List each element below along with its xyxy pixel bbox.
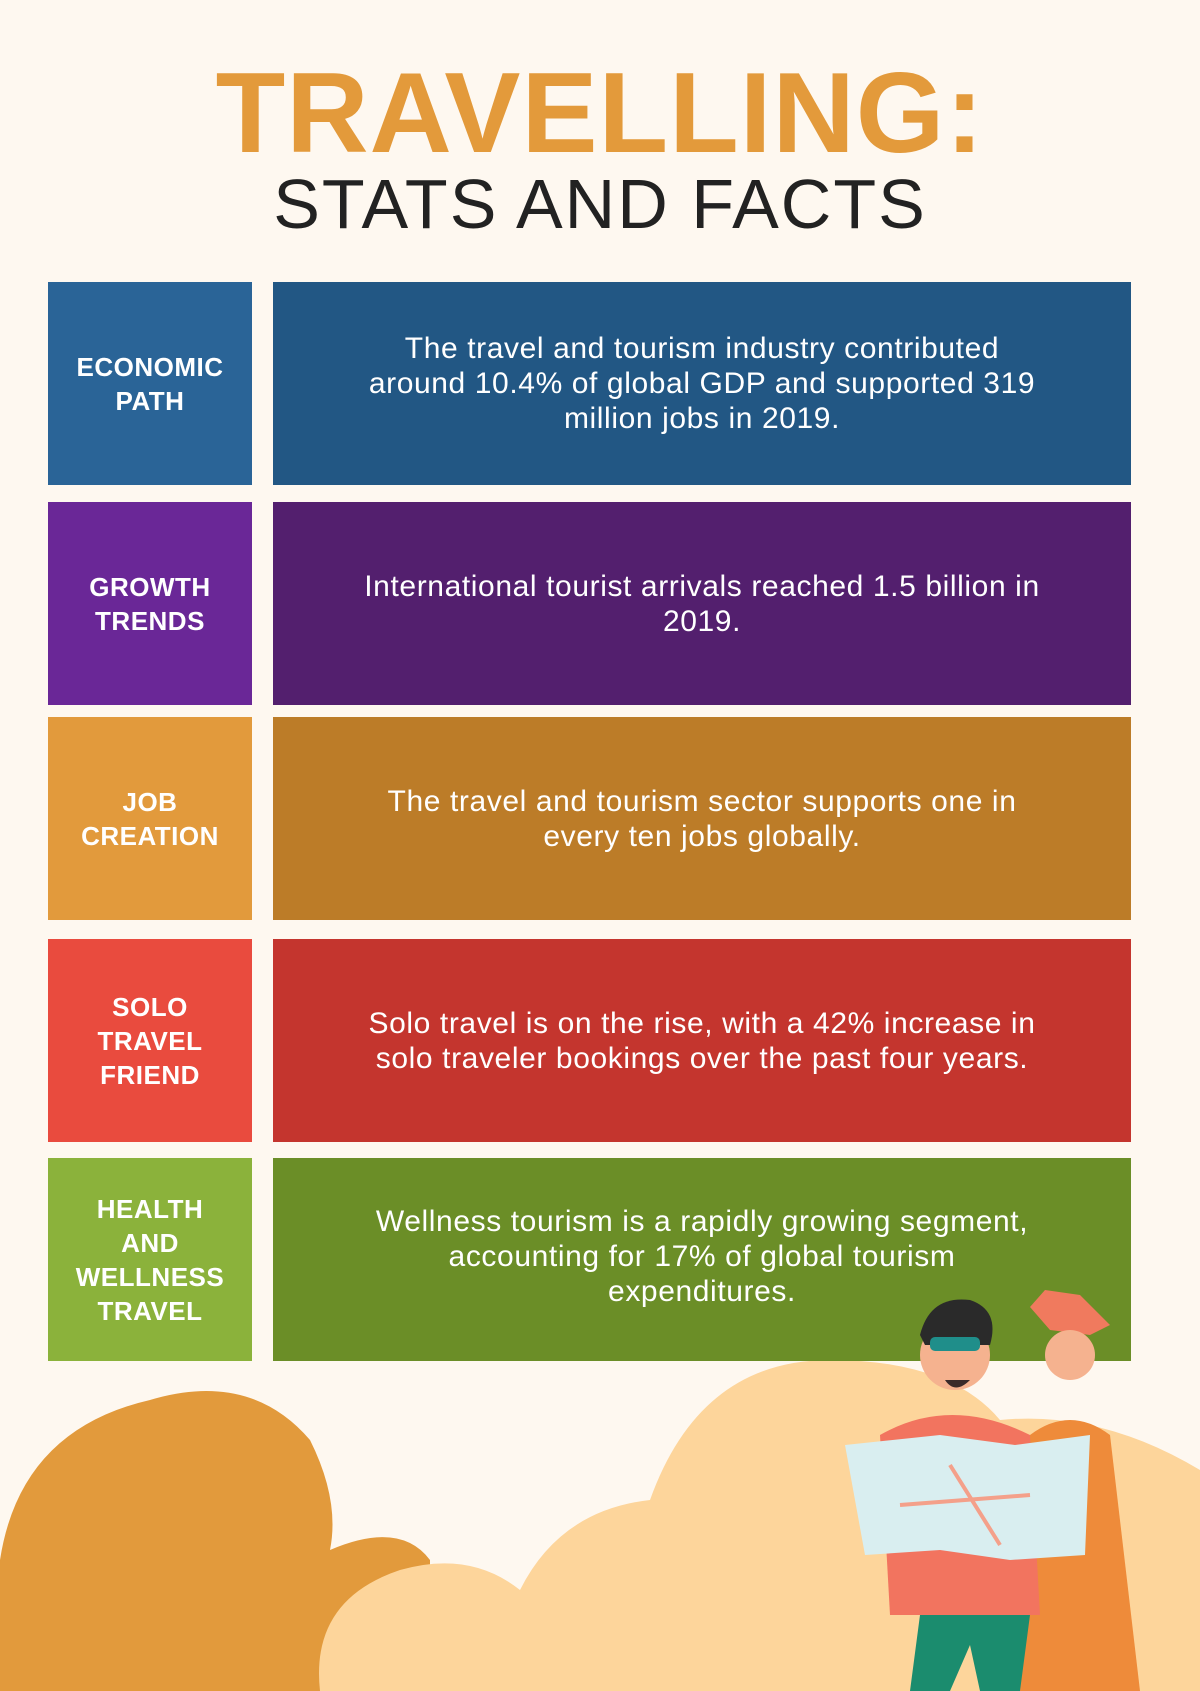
row 4 label: TRAVEL (97, 1026, 203, 1056)
row 5 text: accounting for 17% of global tourism (449, 1240, 955, 1273)
background clouds (0, 1361, 1200, 1691)
row 5 label (48, 1158, 252, 1361)
row 3 text: The travel and tourism sector supports one in (388, 784, 1016, 818)
row 5 label: TRAVEL (97, 1296, 203, 1326)
row 3 label: JOB (122, 786, 177, 816)
row 2 label: GROWTH (89, 572, 211, 602)
row 1 text (273, 282, 1131, 485)
row 5 label: AND (121, 1228, 179, 1258)
row 3 label (48, 717, 252, 920)
title: TRAVELLING: (216, 50, 984, 177)
row 1 label (48, 282, 252, 485)
row 4 text (273, 939, 1131, 1142)
row 2 label (48, 502, 252, 705)
row 4 text: solo traveler bookings over the past four years. (376, 1042, 1028, 1074)
row 1 text: around 10.4% of global GDP and supported 319 (369, 367, 1035, 400)
illustration: travellers with map (845, 1290, 1140, 1691)
row 5 text: Wellness tourism is a rapidly growing segment, (376, 1205, 1028, 1238)
row 4 text: Solo travel is on the rise, with a 42% increase in (368, 1006, 1036, 1040)
row 2 text: International tourist arrivals reached 1.5 billion in (364, 570, 1040, 602)
row 1 text: The travel and tourism industry contributed (405, 332, 999, 365)
row 3 text: every ten jobs globally. (543, 820, 861, 852)
row 5 text (273, 1158, 1131, 1361)
row 1 label: ECONOMIC (76, 352, 224, 382)
row 4 label: FRIEND (100, 1060, 200, 1090)
row 5 text: expenditures. (608, 1275, 796, 1308)
row 4 label (48, 939, 252, 1142)
row 1 text: million jobs in 2019. (564, 402, 840, 435)
row 2 text (273, 502, 1131, 705)
row 5 label: WELLNESS (76, 1262, 224, 1292)
row 2 text: 2019. (663, 604, 741, 638)
row 1 label: PATH (116, 386, 184, 416)
row 4 label: SOLO (112, 992, 188, 1022)
row 3 text (273, 717, 1131, 920)
row 3 label: CREATION (81, 820, 219, 850)
subtitle: STATS AND FACTS (273, 165, 927, 243)
row 2 label: TRENDS (95, 606, 205, 636)
row 5 label: HEALTH (97, 1194, 203, 1224)
